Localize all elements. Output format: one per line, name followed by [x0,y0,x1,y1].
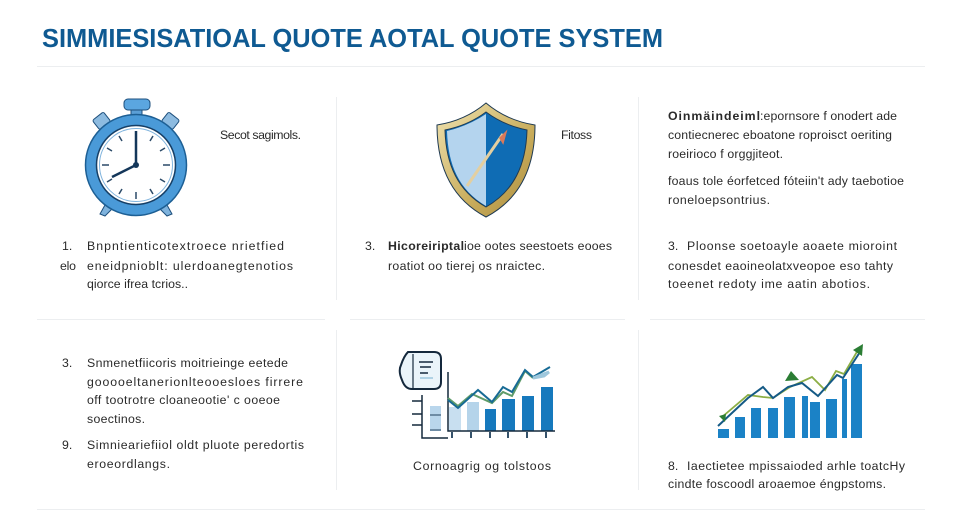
list item 3 right: conesdet eaoineolatxveopoe eso tahty [668,259,894,273]
panel: growth chart [668,344,906,491]
list item 8: cindte foscoodl aroaemoe éngpstoms. [668,477,886,491]
list item 3: 3. [365,239,375,253]
list item 3 lower: 3. [62,356,72,370]
list item 8: Iaectietee mpissaioded arhle toatcHy [687,459,906,473]
paragraph one: Oinmäindeiml [668,109,760,123]
list item 1: elo [60,259,76,273]
list item 9 [62,438,304,471]
list item 1 [60,239,293,291]
list item 3: ioe ootes seestoets eooes [464,239,612,253]
paragraph one: contiecnerec eboatone roproisct oeriting [668,128,892,142]
list item 9: eroeordlangs. [87,457,170,471]
paragraph one [668,109,897,161]
paragraph two: foaus tole éorfetced fóteiin't ady taebotioe [668,174,904,188]
panel: text column [668,109,904,291]
panel: shield [365,103,612,273]
icon: shield [437,103,535,217]
list item 9: Simnieariefiiol oldt pluote peredortis [87,438,304,452]
shield label: Fitoss [561,128,592,142]
panel: bar chart with document [400,352,555,473]
list item 3 lower: gooooeltanerionlteooesloes firrere [87,375,303,389]
list item 3 lower: Snmenetfiicoris moitrieinge eetede [87,356,288,370]
list item 9: 9. [62,438,72,452]
panel: stopwatch [60,99,301,291]
panel: lower left text [62,356,304,471]
list item 1: eneidpnioblt: ulerdoanegtenotios [87,259,293,273]
list item 3 [365,239,612,273]
list item 3 right [668,239,898,291]
list item 3 right: Ploonse soetoayle aoaete mioroint [687,239,898,253]
list item 3 lower: off tootrotre cloaneootie' c ooeoe [87,393,280,407]
icon: document [400,352,441,389]
title: SIMMIESISATIOAL QUOTE AOTAL QUOTE SYSTEM [42,23,663,53]
list item 3 lower [62,356,303,426]
list item 8 [668,459,906,491]
paragraph one: :epornsore f onodert ade [760,109,897,123]
list item 1: qiorce ifrea tcrios.. [87,277,188,291]
stopwatch label: Secot sagimols. [220,128,301,142]
list item 1: Bnpntienticotextroece nrietfied [87,239,284,253]
list item 8: 8. [668,459,678,473]
paragraph two: roneloepsontrius. [668,193,770,207]
list item 1: 1. [62,239,72,253]
list item 3: roatiot oo tierej os nraictec. [388,259,545,273]
bar chart [412,367,555,438]
growth bar chart [718,344,863,438]
paragraph two [668,174,904,207]
list item 3: Hicoreiriptal [388,239,464,253]
list item 3 right: 3. [668,239,678,253]
icon: stopwatch [86,99,186,216]
list item 3 lower: soectinos. [87,412,145,426]
chart caption: Cornoagrig og tolstoos [413,459,551,473]
paragraph one: roeirioco f orggjiteot. [668,147,783,161]
list item 3 right: toeenet redoty ime aatin abotios. [668,277,870,291]
